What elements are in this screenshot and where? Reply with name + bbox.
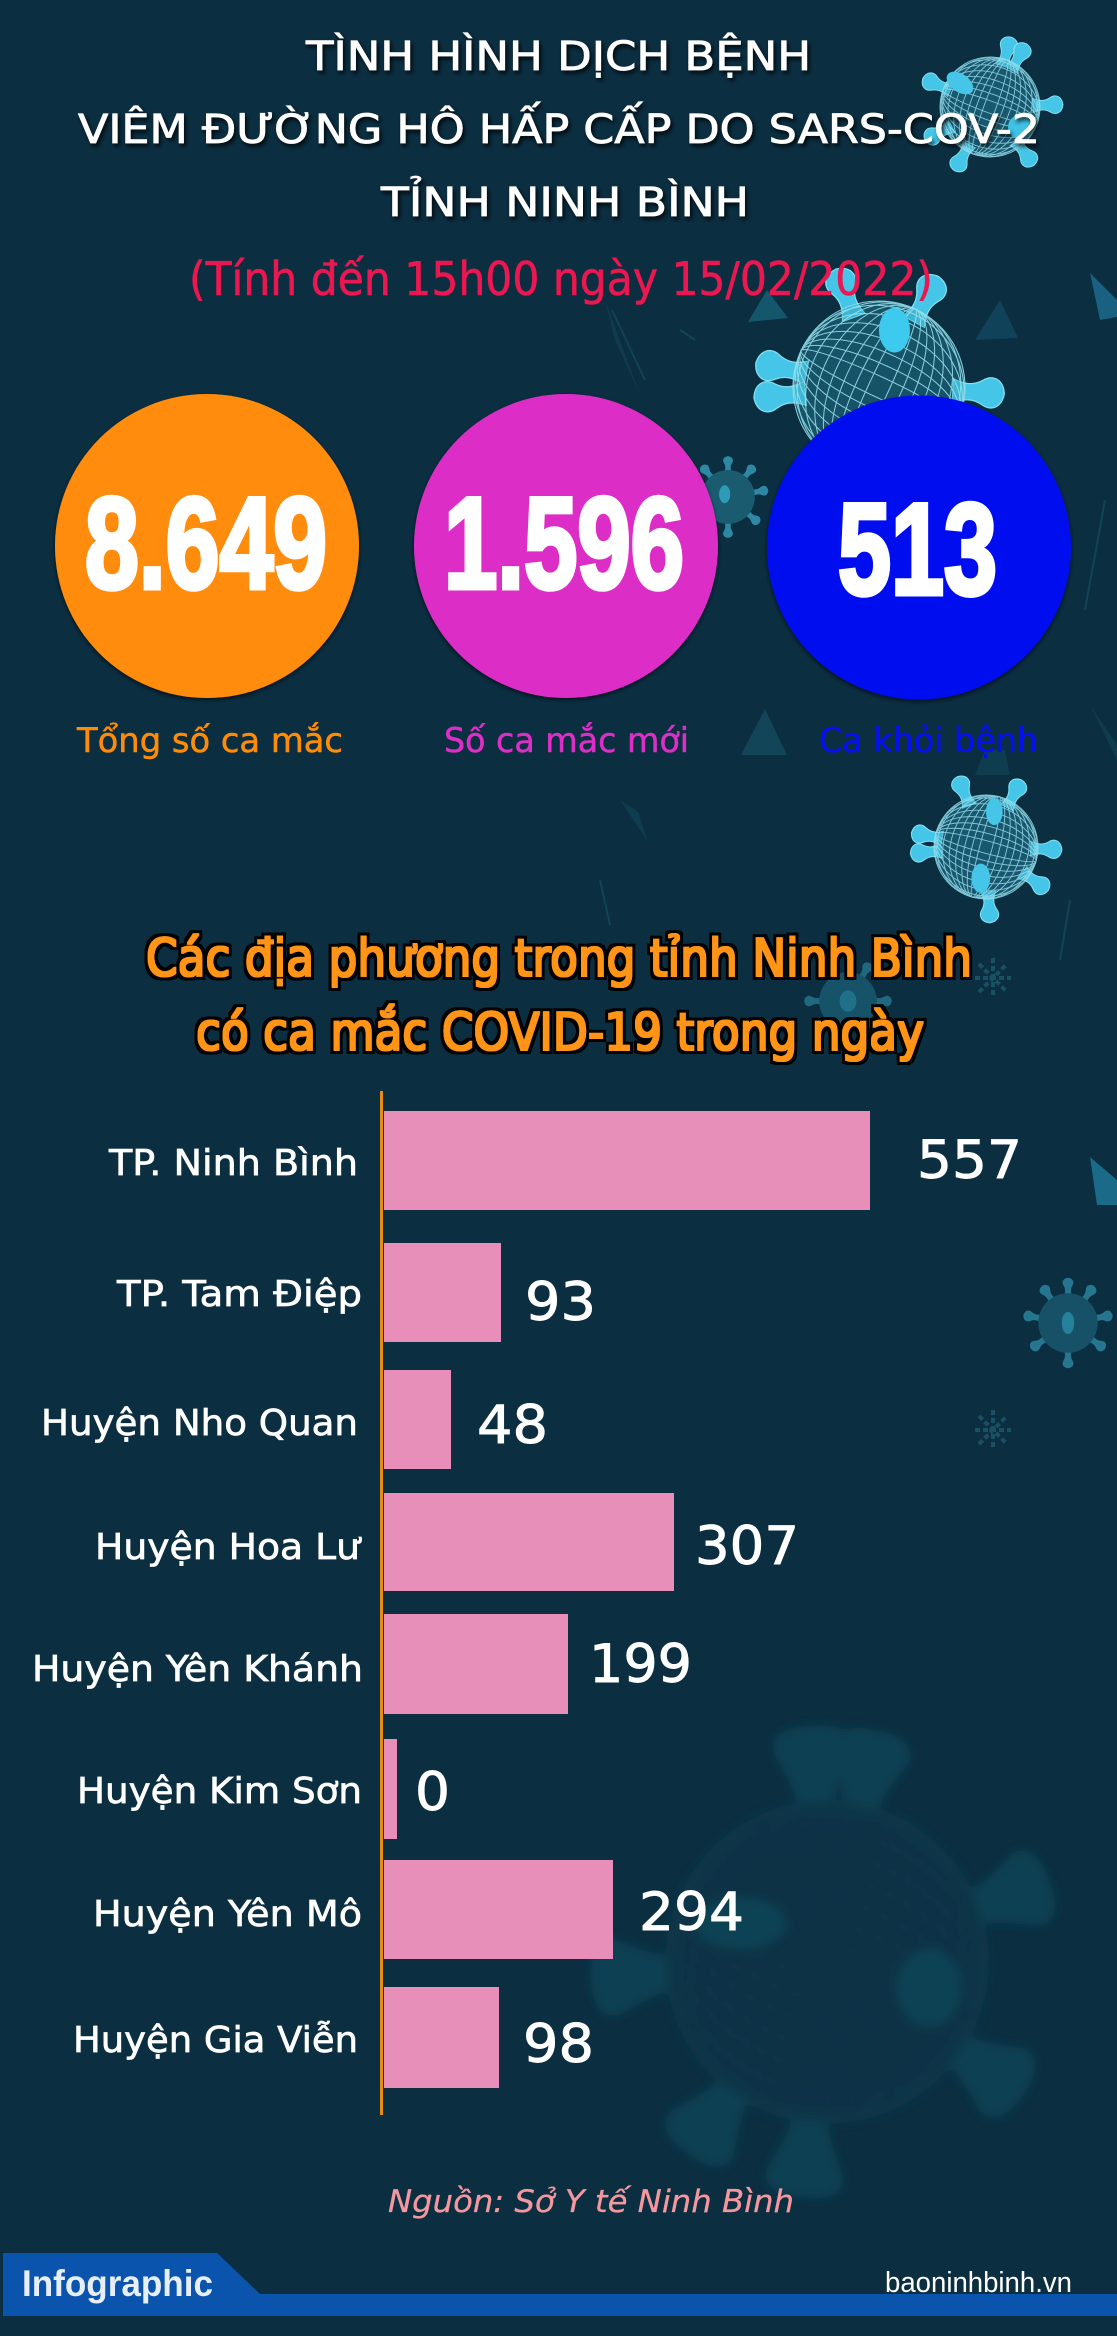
icon: snowflake upper <box>975 958 1011 998</box>
icon: virus large centre <box>753 264 1005 501</box>
recovered label: Ca khỏi bệnh <box>819 721 1038 761</box>
icon: virus small behind circles <box>687 456 769 538</box>
bar chart <box>32 1091 1022 2115</box>
category labels: TP. Tam Điệp <box>116 1274 362 1315</box>
heading: localities: Các địa phương trong tỉnh Ninh Bình <box>146 929 972 989</box>
icon: snowflake lower <box>975 1410 1011 1450</box>
background decorations: triangles and shards <box>600 273 1117 1205</box>
footer shape <box>3 2253 1117 2316</box>
new label: Số ca mắc mới <box>444 721 689 761</box>
value labels <box>415 1130 1022 2075</box>
source note: Nguồn: Sở Y tế Ninh Bình <box>388 2184 794 2220</box>
title <box>78 32 1040 226</box>
heading: localities: có ca mắc COVID-19 trong ngày <box>196 1003 924 1063</box>
title: VIÊM ĐƯỜNG HÔ HẤP CẤP DO SARS-COV-2 <box>78 101 1040 153</box>
icon: virus mid right <box>910 773 1062 923</box>
value labels: 307 <box>695 1516 799 1577</box>
footer tag: Infographic <box>22 2263 213 2304</box>
value labels: 0 <box>415 1762 450 1823</box>
category labels: Huyện Hoa Lư <box>95 1527 362 1568</box>
stat: new cases <box>414 394 718 761</box>
icon: virus faint behind heading <box>804 960 892 1036</box>
title: TÌNH HÌNH DỊCH BỆNH <box>305 32 811 80</box>
icon: virus faint right <box>1022 1278 1114 1368</box>
title: TỈNH NINH BÌNH <box>380 175 749 226</box>
value labels: 93 <box>525 1272 596 1333</box>
icon: huge faint virus <box>588 1722 1063 2202</box>
total number: 8.649 <box>85 470 327 616</box>
heading: localities <box>146 929 972 1063</box>
category labels: Huyện Nho Quan <box>41 1403 358 1444</box>
category labels: Huyện Gia Viễn <box>73 2020 358 2061</box>
stat: total cases <box>55 394 359 761</box>
subtitle: date: (Tính đến 15h00 ngày 15/02/2022) <box>189 252 933 306</box>
category labels: TP. Ninh Bình <box>108 1143 358 1184</box>
total label: Tổng số ca mắc <box>76 721 343 761</box>
orange circle <box>55 394 359 698</box>
category labels <box>32 1143 363 2061</box>
recovered number: 513 <box>838 476 997 622</box>
category labels: Huyện Kim Sơn <box>77 1771 362 1812</box>
website: baoninhbinh.vn <box>885 2267 1072 2299</box>
value labels: 294 <box>639 1882 744 1943</box>
stat: recovered <box>767 396 1071 761</box>
category labels: Huyện Yên Khánh <box>32 1649 363 1690</box>
value labels: 48 <box>477 1395 548 1456</box>
footer band <box>3 2253 1117 2316</box>
blue circle <box>767 396 1071 700</box>
magenta circle <box>414 394 718 698</box>
axis <box>380 1091 383 2115</box>
new number: 1.596 <box>444 470 684 616</box>
value labels: 98 <box>523 2014 594 2075</box>
icon: virus top right <box>919 35 1063 175</box>
category labels: Huyện Yên Mô <box>93 1894 362 1935</box>
value labels: 199 <box>589 1634 692 1695</box>
value labels: 557 <box>917 1130 1022 1191</box>
bars <box>384 1111 870 2088</box>
